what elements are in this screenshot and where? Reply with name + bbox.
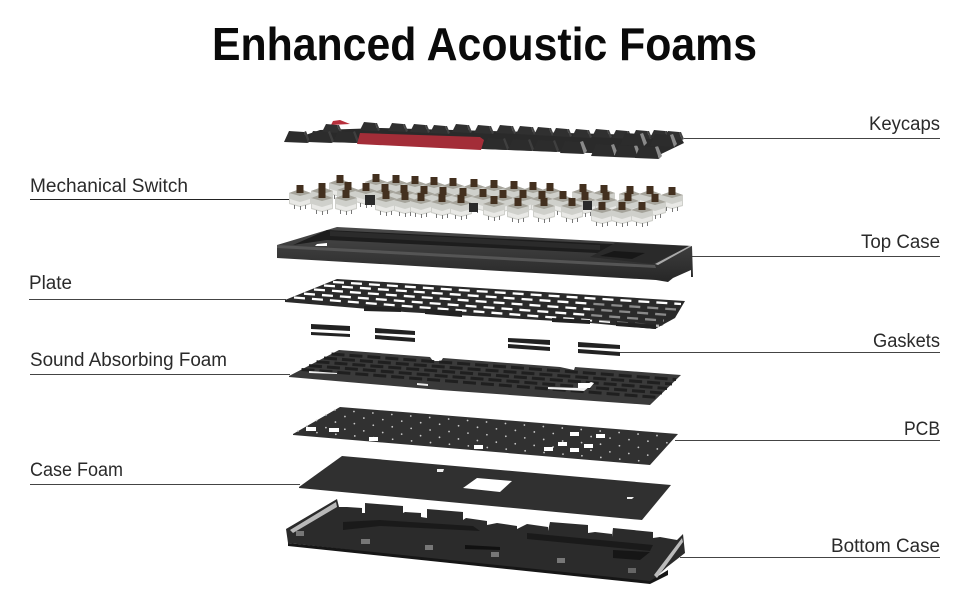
callout: keycaps: Keycaps: [869, 114, 940, 135]
top case layer: [277, 227, 693, 282]
callout: pcb: PCB: [904, 419, 940, 440]
title: Enhanced Acoustic Foams: [212, 18, 757, 70]
callout: sound absorbing foam: Sound Absorbing Foam: [30, 350, 227, 371]
sound absorbing foam layer: [289, 350, 681, 405]
gaskets layer: [311, 324, 620, 356]
bottom case layer: [286, 499, 685, 584]
red spacebar: [357, 133, 484, 150]
plate layer: [285, 279, 685, 329]
callout: top case: Top Case: [861, 232, 940, 253]
pcb layer: [293, 407, 678, 465]
case foam layer: [299, 456, 671, 520]
callout: mechanical switch: Mechanical Switch: [30, 176, 188, 197]
callout: bottom case: Bottom Case: [831, 536, 940, 557]
callout: plate: Plate: [29, 273, 72, 294]
switches layer: [289, 174, 683, 227]
callout: case foam: Case Foam: [30, 460, 123, 481]
keycaps layer: [284, 120, 684, 159]
callout: gaskets: Gaskets: [873, 331, 940, 352]
